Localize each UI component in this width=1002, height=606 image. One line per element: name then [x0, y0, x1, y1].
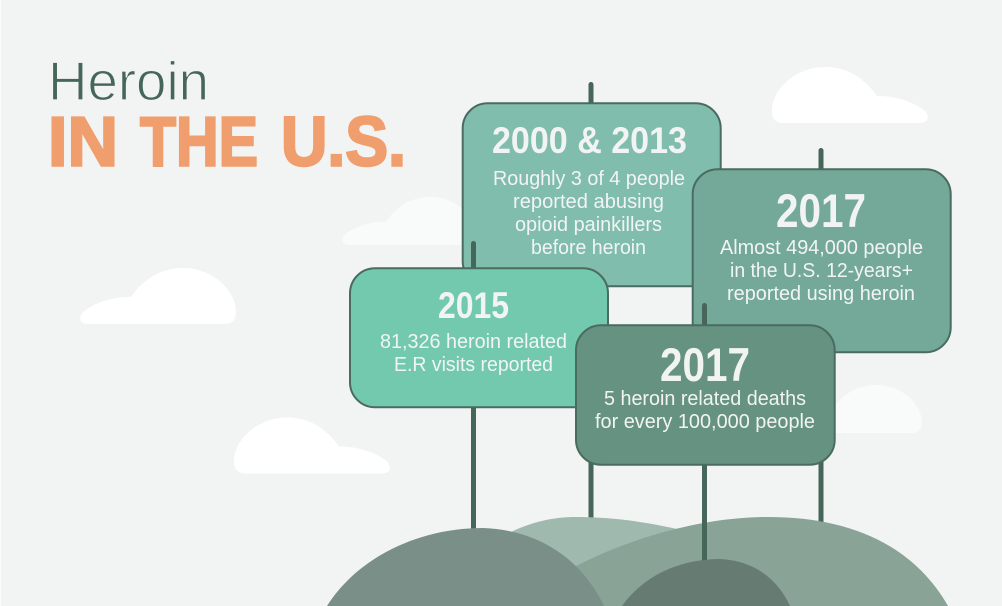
title line: IN THE U.S.: IN [48, 102, 118, 180]
year: 2017 [660, 338, 750, 391]
description: before heroin [531, 237, 646, 259]
title line: IN THE U.S.: THE [140, 102, 258, 180]
description: 81,326 heroin related [380, 331, 567, 353]
description: Roughly 3 of 4 people [493, 168, 685, 190]
description: Almost 494,000 people [720, 237, 923, 259]
hill: front small [622, 559, 790, 606]
post: first sign [588, 82, 594, 522]
title line: IN THE U.S.: U.S. [281, 102, 406, 180]
hill: right [515, 517, 948, 606]
post: front sign [702, 303, 707, 565]
title line: Heroin: Heroin [48, 50, 209, 112]
description: E.R visits reported [394, 354, 553, 376]
title [48, 50, 406, 180]
description [720, 237, 923, 305]
hill: back [440, 517, 690, 606]
sign: 2000 and 2013 [463, 103, 721, 286]
sign: 2017 users [693, 169, 951, 352]
description: in the U.S. 12-years+ [730, 260, 913, 282]
cloud: top right [772, 67, 928, 123]
sign: 2015 [350, 268, 608, 407]
year: 2017 [776, 184, 866, 237]
year: 2000 & 2013 [492, 120, 687, 161]
description: 5 heroin related deaths [604, 388, 806, 410]
description: reported using heroin [727, 283, 915, 305]
year: 2015 [438, 285, 509, 326]
description: reported abusing [513, 191, 664, 213]
description: opioid painkillers [515, 214, 662, 236]
hill: left [327, 528, 604, 606]
cloud: behind first sign [342, 197, 476, 245]
description: for every 100,000 people [595, 411, 815, 433]
cloud: left [80, 268, 236, 324]
sign: 2017 deaths [576, 325, 835, 465]
cloud: lower middle [234, 418, 390, 474]
post: right sign [818, 148, 824, 528]
title line: IN THE U.S. [48, 102, 406, 180]
cloud: behind front sign [788, 385, 922, 433]
post: 2015 sign [471, 241, 476, 536]
description [380, 331, 567, 376]
description [595, 388, 815, 433]
description [493, 168, 685, 259]
